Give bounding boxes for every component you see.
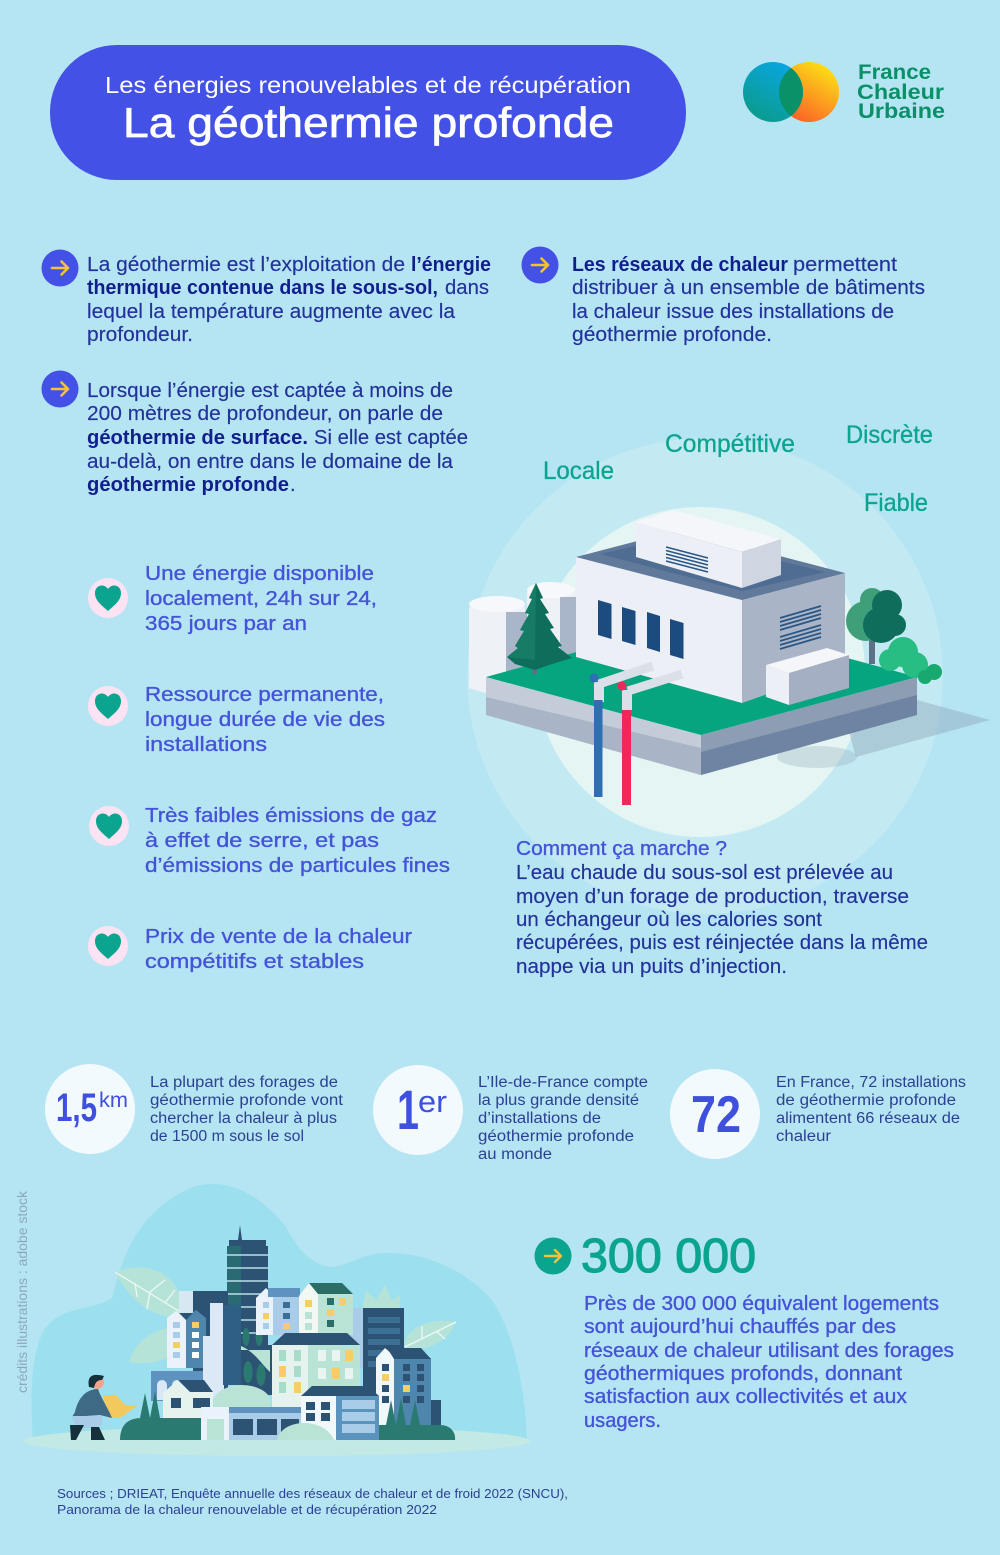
icon: arrow bullet <box>522 246 558 284</box>
benefit: competitive prices: Prix de vente de la chaleur <box>145 925 412 948</box>
benefit: permanent resource: Ressource permanente, <box>145 683 384 706</box>
text block: how it works <box>516 837 928 978</box>
stat: 1,5 km: de 1500 m sous le sol <box>150 1128 304 1145</box>
pine tree <box>507 583 572 674</box>
benefit: permanent resource: installations <box>145 733 267 756</box>
text block: how it works: moyen d’un forage de production, traverse <box>516 886 909 908</box>
stat: 1,5 km: 1,5 <box>56 1086 97 1130</box>
logo: France Chaleur Urbaine: France <box>858 61 931 84</box>
benefit: competitive prices <box>88 925 412 973</box>
intro paragraph: surface vs deep: Lorsque l’énergie est captée à moins de <box>87 380 453 402</box>
stat: 1er: au monde <box>478 1146 552 1163</box>
title banner <box>50 45 686 180</box>
icon: arrow bullet <box>42 370 78 408</box>
icon: arrow bullet <box>42 250 78 286</box>
sources: Sources ; DRIEAT, Enquête annuelle des réseaux de chaleur et de froid 2022 (SNCU), <box>57 1486 568 1501</box>
intro paragraph: heat networks: la chaleur issue des installations de <box>572 301 894 323</box>
main building <box>576 510 845 703</box>
text block: 300 000 homes: géothermiques profonds, donnant <box>584 1362 902 1385</box>
sources: Panorama de la chaleur renouvelable et de récupération 2022 <box>57 1502 437 1517</box>
stat: 72 <box>670 1069 966 1159</box>
benefit: permanent resource: longue durée de vie des <box>145 708 385 731</box>
text block: 300 000 homes: usagers. <box>584 1409 661 1432</box>
text block: 300 000 homes: sont aujourd’hui chauffés par des <box>584 1315 896 1338</box>
text block: how it works: nappe via un puits d’injection. <box>516 956 787 978</box>
stat: 1,5 km: La plupart des forages de <box>150 1074 338 1091</box>
stat: 72: alimentent 66 réseaux de <box>776 1110 960 1127</box>
back buildings <box>179 1291 404 1398</box>
intro paragraph: heat networks: distribuer à un ensemble de bâtiments <box>572 277 925 299</box>
storage tanks <box>469 582 578 695</box>
keyword: Compétitive: Compétitive <box>665 430 795 458</box>
equipment box <box>766 648 849 705</box>
keyword: Fiable: Fiable <box>864 489 928 517</box>
leaves <box>115 1267 456 1363</box>
right trees <box>846 588 942 684</box>
green mounds <box>120 1385 455 1440</box>
benefit: permanent resource <box>88 683 385 756</box>
intro paragraph: definition: l’énergie <box>411 254 491 276</box>
illustration credit: crédits illustrations : adobe stock <box>14 1190 30 1393</box>
benefit: local availability: localement, 24h sur 24, <box>145 587 377 610</box>
intro paragraph: surface vs deep: Si elle est captée <box>314 427 468 449</box>
text block: 300 000 homes: réseaux de chaleur utilisant des forages <box>584 1339 954 1362</box>
front buildings <box>201 1386 379 1440</box>
stat: 1,5 km <box>45 1064 344 1154</box>
intro paragraph: definition: La géothermie est l’exploitation de <box>87 254 405 276</box>
stat: 72: de géothermie profonde <box>776 1092 956 1109</box>
stat: 1er: d’installations de <box>478 1110 601 1127</box>
logo: France Chaleur Urbaine: Chaleur <box>857 81 944 104</box>
title banner: Les énergies renouvelables et de récupération <box>105 72 631 98</box>
stat: 72: En France, 72 installations <box>776 1074 966 1091</box>
illustration: city with gardener <box>24 1184 530 1456</box>
benefit: local availability: 365 jours par an <box>145 612 307 635</box>
headline figure: 300 000: 300 000 <box>581 1230 756 1283</box>
intro paragraph: heat networks: géothermie profonde. <box>572 324 772 346</box>
central houses <box>256 1283 360 1407</box>
intro paragraph: heat networks <box>522 246 925 346</box>
intro paragraph: definition: dans <box>445 277 489 299</box>
intro paragraph: surface vs deep: 200 mètres de profondeur, on parle de <box>87 403 443 425</box>
illustration: geothermal plant <box>467 438 990 914</box>
keyword: Locale: Locale <box>543 457 614 485</box>
benefit: low emissions <box>89 804 450 877</box>
intro paragraph: definition: profondeur. <box>87 324 193 346</box>
stat: 72: 72 <box>691 1086 741 1144</box>
icon: arrow bullet <box>534 1238 572 1274</box>
stat: 1er: 1 <box>397 1078 419 1141</box>
stat: 1er: géothermie profonde <box>478 1128 634 1145</box>
intro paragraph: definition: lequel la température augmente avec la <box>87 301 456 323</box>
icon: heart <box>88 578 128 618</box>
intro paragraph: surface vs deep <box>42 370 468 496</box>
intro paragraph: heat networks: permettent <box>793 254 897 276</box>
production and injection pipes <box>590 666 682 805</box>
stat: 1,5 km: géothermie profonde vont <box>150 1092 344 1109</box>
stat: 1,5 km: chercher la chaleur à plus <box>150 1110 337 1127</box>
left tall houses <box>151 1303 272 1401</box>
stat: 1er <box>373 1065 648 1163</box>
title banner: La géothermie profonde <box>123 99 614 146</box>
stat: 1er: er <box>418 1084 447 1119</box>
logo: France Chaleur Urbaine: Urbaine <box>858 100 945 123</box>
intro paragraph: definition <box>42 250 491 346</box>
keyword: Discrète: Discrète <box>846 421 933 449</box>
windows <box>598 600 684 659</box>
benefit: competitive prices: compétitifs et stables <box>145 950 364 973</box>
text block: how it works: Comment ça marche ? <box>516 837 727 860</box>
logo: France Chaleur Urbaine <box>743 61 945 123</box>
stat: 1er: L’Ile-de-France compte <box>478 1074 648 1091</box>
icon: heart <box>89 806 129 846</box>
intro paragraph: surface vs deep: . <box>290 474 296 496</box>
benefit: local availability: Une énergie disponible <box>145 562 374 585</box>
text block: how it works: L’eau chaude du sous-sol est prélevée au <box>516 862 893 884</box>
intro paragraph: surface vs deep: géothermie profonde <box>87 474 289 496</box>
roof unit <box>636 510 781 588</box>
benefit: low emissions: d’émissions de particules fines <box>145 854 450 877</box>
intro paragraph: heat networks: Les réseaux de chaleur <box>572 254 788 276</box>
text block: 300 000 homes: satisfaction aux collectivités et aux <box>584 1385 908 1408</box>
small house <box>163 1380 213 1418</box>
benefit: local availability <box>88 562 377 635</box>
text block: how it works: récupérées, puis est réinjectée dans la même <box>516 932 928 954</box>
icon: heart <box>88 926 128 966</box>
intro paragraph: surface vs deep: géothermie de surface. <box>87 427 308 449</box>
icon: heart <box>88 686 128 726</box>
ground shadow <box>777 700 990 768</box>
benefit: low emissions: à effet de serre, et pas <box>145 829 379 852</box>
ground block <box>486 618 917 775</box>
tower <box>227 1225 268 1351</box>
text block: 300 000 homes: Près de 300 000 équivalent logements <box>584 1292 939 1315</box>
sources <box>57 1486 568 1517</box>
right tower house <box>376 1348 441 1425</box>
text block: 300 000 homes <box>584 1292 954 1432</box>
intro paragraph: surface vs deep: au-delà, on entre dans le domaine de la <box>87 451 454 473</box>
stat: 1,5 km: km <box>99 1089 128 1112</box>
benefit: low emissions: Très faibles émissions de gaz <box>145 804 437 827</box>
intro paragraph: definition: thermique contenue dans le sous-sol, <box>87 277 438 299</box>
stat: 72: chaleur <box>776 1128 831 1145</box>
text block: how it works: un échangeur où les calories sont <box>516 909 822 931</box>
stat: 1er: la plus grande densité <box>478 1092 639 1109</box>
side vents <box>780 606 821 649</box>
gardener with watering can <box>70 1375 138 1440</box>
